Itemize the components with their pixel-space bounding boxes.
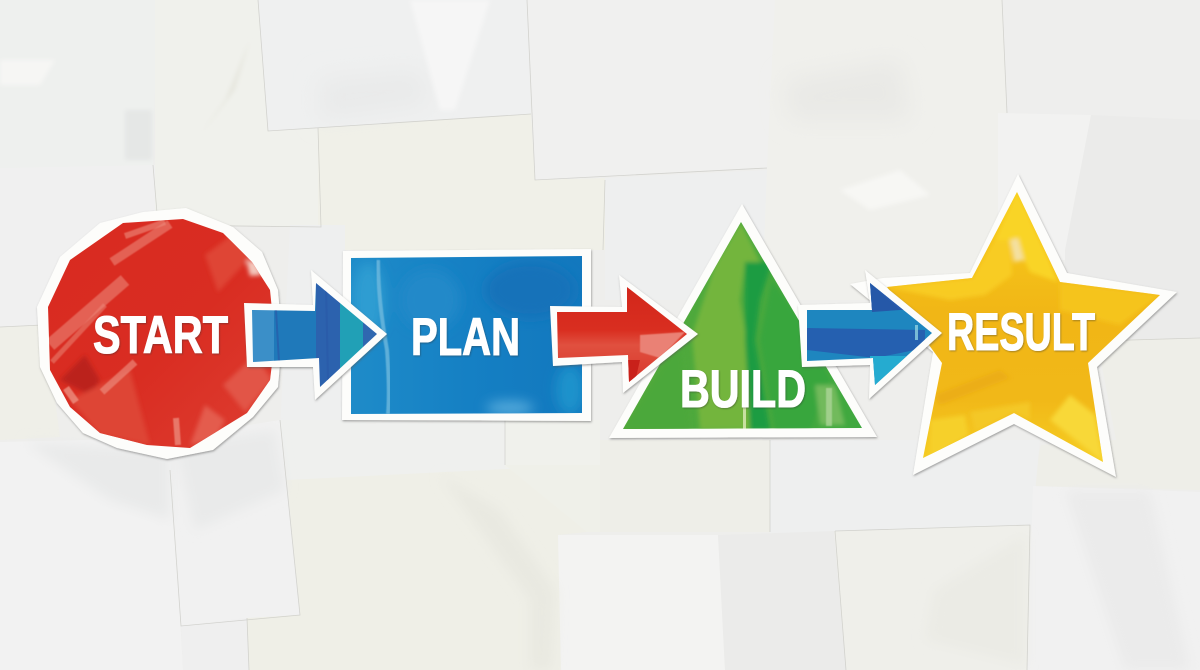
- shape: BUILD triangle: [609, 204, 877, 438]
- label: BUILD: BUILD: [680, 360, 806, 419]
- label: PLAN: PLAN: [411, 308, 520, 367]
- arrow: plan to build: [550, 275, 698, 393]
- label: RESULT: RESULT: [947, 303, 1095, 362]
- shape: START circle: [37, 208, 282, 459]
- shape: PLAN rectangle: [342, 249, 591, 421]
- arrow: start to plan: [244, 270, 387, 400]
- label: START: START: [93, 306, 228, 365]
- shape: RESULT star: [850, 174, 1177, 477]
- arrow: build to result: [798, 270, 942, 399]
